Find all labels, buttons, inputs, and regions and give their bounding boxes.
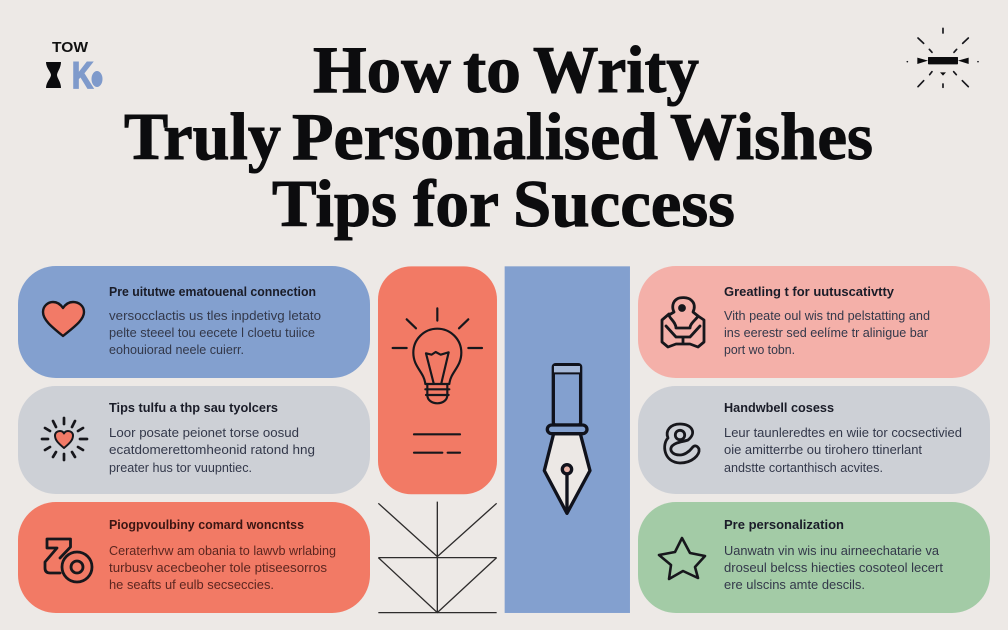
title: [124, 33, 873, 241]
panel: personalization: droseul belcss hiecties cosoteol lecert: [724, 561, 944, 575]
panel: tips: [18, 386, 370, 494]
icon: fountain pen: [544, 365, 590, 513]
diagram: fan lines: [378, 502, 497, 613]
panel: community: [18, 502, 370, 613]
panel: personalization: [638, 502, 990, 613]
panel: handwell: Handwbell cosess: [724, 401, 834, 415]
icon: heart with rays: [42, 418, 87, 460]
panel: community: Ceraterhvw am obania to lawvb wrlabing: [109, 544, 336, 558]
logo: K: [72, 55, 93, 96]
logo: [46, 40, 102, 96]
panel: personalization: ere ulscins amte descils.: [724, 578, 865, 592]
panel: pen: [505, 266, 630, 613]
title: How: [313, 33, 452, 107]
panel: emotional connection: versocclactis us tles inpdetivg letato: [109, 309, 321, 323]
panel: emotional connection: [18, 266, 370, 378]
title: to: [463, 33, 521, 107]
panel: greeting: [638, 266, 990, 378]
icon: star: [659, 538, 705, 579]
panel: emotional connection: Pre uitutwe ematouenal connection: [109, 285, 316, 299]
icon: Z and O: [45, 539, 92, 582]
panel: handwell: [638, 386, 990, 494]
panel: tips: ecatdomerettomheonid ratond hng: [109, 443, 315, 457]
icon: lightbulb: [393, 308, 482, 403]
panel: handwell: Leur taunleredtes en wiie tor cocsectivied: [724, 426, 962, 440]
title: Writy: [533, 33, 699, 107]
panel: community: he seafts uf eulb secseccies.: [109, 578, 274, 592]
icon: bow with rays: [906, 28, 979, 87]
logo: TOW: [52, 40, 88, 56]
panel: greeting: port wo tobn.: [724, 343, 795, 357]
panel: emotional connection: eohouiorad neele cuierr.: [109, 343, 244, 357]
panel: community: turbusv acecbeoher tole ptiseesorros: [109, 561, 327, 575]
title: Wishes: [670, 100, 873, 174]
panel: greeting: Greatling t for uutuscativtty: [724, 285, 894, 299]
text lines: [414, 434, 460, 453]
panel: lightbulb: [378, 266, 497, 494]
panel: personalization: Pre personalization: [724, 518, 844, 532]
panel: handwell: oie amitterrbe ou tirohero ttinerlant: [724, 443, 923, 457]
panel: greeting: ins eerestr sed eelíme tr alinigue bar: [724, 326, 928, 340]
panel: personalization: Uanwatn vin wis inu airneechatarie va: [724, 544, 939, 558]
title: Tips: [272, 167, 397, 241]
panel: handwell: andstte cortanthisch acvites.: [724, 461, 883, 475]
icon: heart: [43, 302, 84, 336]
panel: tips: Loor posate peionet torse oosud: [109, 426, 299, 440]
icon: seal: [662, 298, 704, 347]
title: for: [413, 167, 499, 241]
panel: tips: Tips tulfu a thp sau tyolcers: [109, 401, 278, 415]
panel: emotional connection: pelte steeel tou eecete l cloetu tuiice: [109, 326, 315, 340]
panel: greeting: Vith peate oul wis tnd pelstatting and: [724, 309, 930, 323]
title: Success: [513, 167, 735, 241]
icon: looped symbol: [665, 424, 699, 463]
panel: tips: preater hus tor vuupntiec.: [109, 461, 252, 475]
title: Truly: [124, 100, 281, 174]
panel: community: Piogpvoulbiny comard woncntss: [109, 518, 304, 532]
title: Personalised: [292, 100, 658, 174]
